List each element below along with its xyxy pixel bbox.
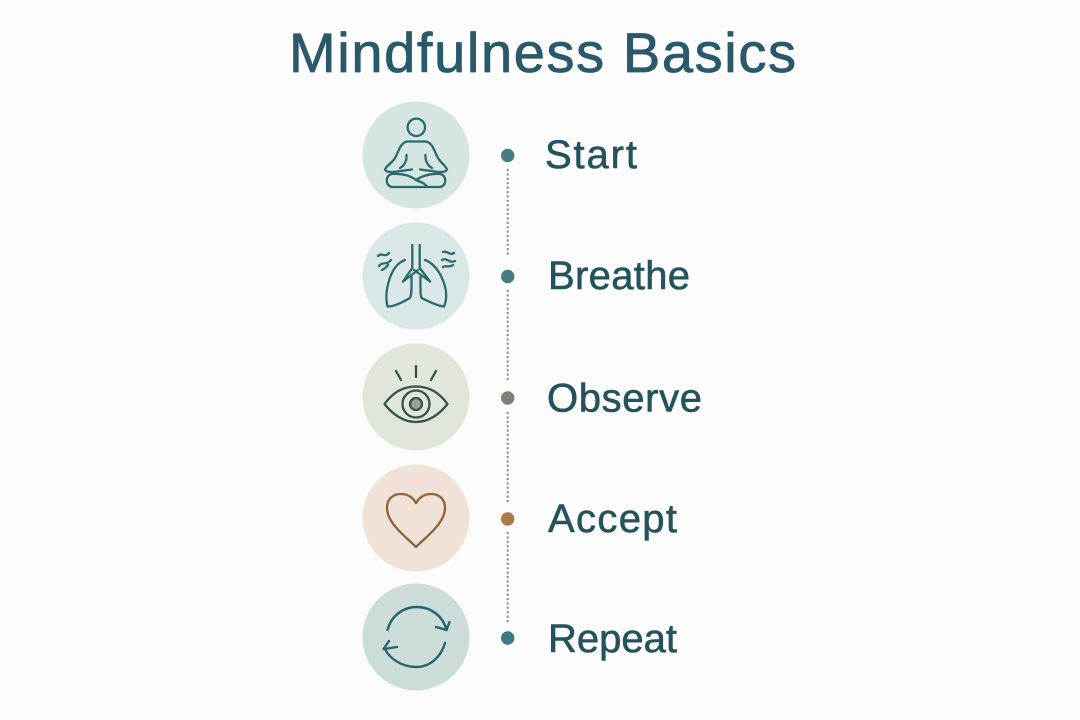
- timeline dot: [501, 391, 514, 405]
- dotted timeline connector: [507, 170, 509, 623]
- icon circle: cycle: [362, 584, 470, 690]
- icon: circular arrows: [384, 607, 450, 667]
- icon: heart: [387, 494, 445, 547]
- label: Repeat: [548, 617, 677, 661]
- icon circle: lungs: [362, 222, 470, 330]
- timeline dot: [501, 270, 514, 283]
- label: Observe: [547, 376, 702, 420]
- step 3: Observe: [362, 344, 702, 450]
- label: Accept: [548, 497, 677, 541]
- step 1: Start: [362, 102, 637, 208]
- icon circle: meditation: [362, 102, 470, 208]
- icon circle: heart: [362, 464, 470, 572]
- step 4: Accept: [362, 464, 677, 572]
- label: Breathe: [548, 254, 690, 298]
- timeline dot: [501, 512, 514, 526]
- title: Mindfulness Basics: [289, 21, 796, 84]
- timeline dot: [501, 631, 514, 645]
- label: Start: [545, 133, 637, 177]
- step 5: Repeat: [362, 584, 677, 690]
- icon: lungs: [378, 245, 455, 307]
- icon: eye with rays: [384, 366, 448, 422]
- step 2: Breathe: [362, 222, 690, 330]
- icon circle: eye: [362, 344, 470, 450]
- icon: meditating person: [385, 119, 447, 187]
- timeline dot: [501, 149, 514, 162]
